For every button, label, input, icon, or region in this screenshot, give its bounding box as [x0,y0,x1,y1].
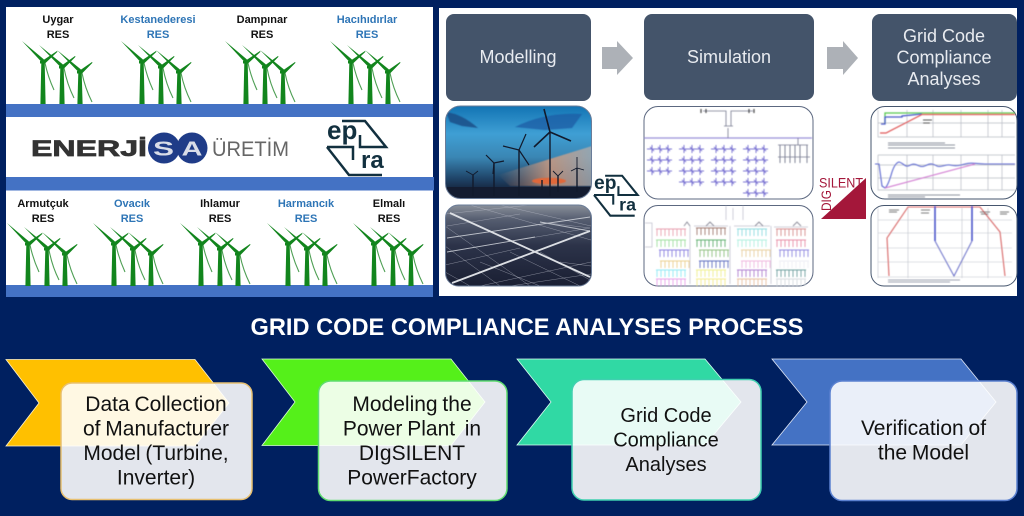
plant labels bottom row: RES [295,213,317,225]
card text [83,393,229,490]
card [61,383,252,500]
card text: DIgSILENT [359,442,465,465]
card text: Modeling the [352,393,472,416]
plant labels bottom row: RES [32,213,54,225]
EPRA logo small: ep [594,173,616,194]
photo outline [446,106,592,198]
photo: solar panels [445,205,592,286]
arrow: modelling to simulation [602,41,633,75]
plant labels top row: RES [47,29,69,41]
plant labels top row: RES [356,29,378,41]
panel: workflow [439,8,1017,296]
box: Simulation [644,14,814,100]
box: Grid Code Compliance Analyses [872,14,1017,101]
card text: Verification of [861,417,986,440]
turbine row 1 band [6,104,433,117]
EPRA logo small: ra [619,195,636,215]
EPRA logo [327,115,386,175]
plant labels top row: Kestanederesi [120,14,196,26]
plant labels top row [42,14,398,41]
card text: of Manufacturer [83,418,229,440]
box: Grid Code Compliance Analyses: Analyses [907,69,981,89]
plant labels bottom row: Ihlamur [200,198,241,210]
diagram: solar plant layout [644,206,813,286]
plant labels top row: Uygar [42,14,74,26]
EPRA logo small [594,173,638,216]
step 4: verification [772,359,1017,500]
bottom band [6,285,433,297]
photo: wind turbines at dusk [445,106,592,199]
chevron [6,360,229,446]
EPRA logo: ra [361,147,384,174]
DIgSILENT logo: DIG [818,190,834,211]
card text [861,417,986,464]
card [572,380,761,500]
plant labels top row: Hacıhıdırlar [337,14,398,26]
plant labels top row: Dampınar [237,14,288,26]
card text [343,393,481,490]
plant labels bottom row [17,198,405,225]
plant labels bottom row: Harmancık [278,198,335,210]
box: Modelling: Modelling [479,47,557,67]
chevron [772,359,996,445]
wind turbines bottom row [7,223,424,286]
card text: the Model [878,442,969,464]
card text: Power Plant in [343,418,481,440]
plant labels bottom row: Ovacık [114,198,151,210]
EPRA logo: ep [327,115,357,145]
chart: voltage and reactive power response [871,106,1017,199]
step 3: compliance analyses [517,359,761,500]
DIgSILENT logo [818,174,866,219]
plant labels bottom row: Armutçuk [17,198,70,210]
chevron [262,359,485,446]
middle band [6,177,434,190]
card text: Model (Turbine, [83,442,229,465]
chart: capability curve [871,206,1017,286]
title: GRID CODE COMPLIANCE ANALYSES PROCESS [250,314,804,341]
diagram: single line wind plant [644,106,813,199]
arrow: simulation to analyses [827,41,858,75]
Enerjisa Uretim logo [31,132,289,164]
card text: Data Collection [85,393,227,416]
step 1: data collection [6,360,252,500]
card text [613,405,719,476]
Enerjisa Uretim logo: ÜRETİM [212,138,289,161]
card [318,381,507,500]
Enerjisa Uretim logo: S [153,138,174,160]
step 2: modeling [262,359,507,500]
box: Simulation: Simulation [687,47,771,67]
card text: PowerFactory [347,466,477,490]
Enerjisa Uretim logo: A [182,138,202,160]
card text: Inverter) [117,466,195,490]
box: Grid Code Compliance Analyses: Compliance [896,48,992,68]
plant labels bottom row: RES [378,213,400,225]
plant labels top row: RES [147,29,169,41]
box: Modelling [446,14,591,101]
card [830,381,1017,500]
plant labels bottom row: RES [209,213,231,225]
plant labels bottom row: Elmalı [373,198,405,210]
card text: Analyses [625,454,707,476]
chevron [517,359,741,445]
wind turbines top row [22,41,400,104]
plant labels bottom row: RES [121,213,143,225]
panel: wind power plants [6,7,434,297]
Enerjisa Uretim logo: ENERJİ [31,136,147,161]
photo outline [446,205,592,286]
DIgSILENT logo: SILENT [819,174,863,190]
plant labels top row: RES [251,29,273,41]
box: Grid Code Compliance Analyses: Grid Code [903,26,985,46]
card text: Grid Code [620,405,712,427]
card text: Compliance [613,430,719,452]
